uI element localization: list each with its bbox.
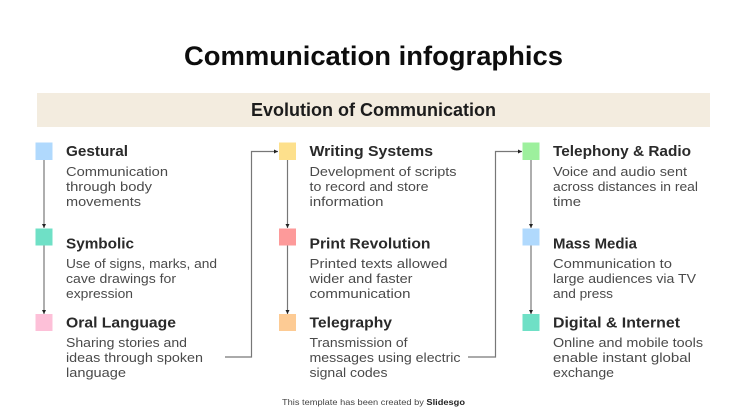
step: gestural: through body xyxy=(66,179,152,194)
step: print revolution: communication xyxy=(310,286,410,301)
arrow: print revolution to telegraphy xyxy=(286,245,288,314)
step: digital and internet xyxy=(522,314,703,380)
step: telephony and radio: across distances in real xyxy=(553,179,698,194)
step: writing systems: information xyxy=(310,194,384,209)
step: telegraphy xyxy=(279,314,461,380)
step: digital and internet: Online and mobile tools xyxy=(553,335,703,350)
step: writing systems: Development of scripts xyxy=(310,164,457,179)
step: mass media: and press xyxy=(553,286,613,301)
step: oral language: Sharing stories and xyxy=(66,335,187,350)
step: gestural: movements xyxy=(66,194,141,209)
step: symbolic: Use of signs, marks, and xyxy=(66,256,217,271)
step: telephony and radio xyxy=(522,142,698,209)
step: digital and internet: enable instant global xyxy=(553,350,691,365)
step: gestural: Gestural xyxy=(66,143,128,160)
title: Communication infographics xyxy=(184,41,563,71)
step: print revolution: Printed texts allowed xyxy=(310,256,448,271)
step: print revolution: wider and faster xyxy=(308,271,413,286)
step: telephony and radio: Telephony & Radio xyxy=(553,143,691,160)
step: writing systems xyxy=(279,142,457,209)
step: telegraphy: messages using electric xyxy=(310,350,461,365)
step: mass media: Mass Media xyxy=(553,236,638,252)
step: oral language xyxy=(36,314,203,380)
arrow: gestural to symbolic xyxy=(43,160,45,228)
arrow: oral language to writing systems xyxy=(225,152,278,357)
step: oral language: language xyxy=(66,365,126,380)
arrow: telephony to mass media xyxy=(530,160,532,228)
step: telephony and radio: time xyxy=(553,194,581,209)
step: print revolution xyxy=(279,228,448,301)
step: symbolic xyxy=(36,228,217,301)
arrow: writing systems to print revolution xyxy=(286,160,288,228)
step: telegraphy: signal codes xyxy=(310,365,388,380)
step: mass media xyxy=(522,228,696,301)
arrow: mass media to digital xyxy=(530,245,532,314)
step: writing systems: Writing Systems xyxy=(310,143,433,160)
step: print revolution: Print Revolution xyxy=(310,236,430,252)
footer credit: This template has been created by Slidesgo xyxy=(282,397,465,407)
step: telegraphy: Transmission of xyxy=(310,335,408,350)
step: symbolic: expression xyxy=(66,286,133,301)
step: oral language: ideas through spoken xyxy=(66,350,203,365)
step: telegraphy: Telegraphy xyxy=(310,314,393,332)
header band: Evolution of Communication xyxy=(251,100,496,120)
step: symbolic: Symbolic xyxy=(66,236,134,252)
step: gestural xyxy=(36,142,168,209)
step: digital and internet: exchange xyxy=(553,365,614,380)
arrow: symbolic to oral language xyxy=(43,245,45,314)
step: telephony and radio: Voice and audio sent xyxy=(553,164,687,179)
step: mass media: Communication to xyxy=(553,256,672,271)
step: oral language: Oral Language xyxy=(66,314,176,332)
step: gestural: Communication xyxy=(66,164,168,179)
step: digital and internet: Digital & Internet xyxy=(553,314,680,332)
step: writing systems: to record and store xyxy=(310,179,428,194)
step: mass media: large audiences via TV xyxy=(553,271,696,286)
step: symbolic: cave drawings for xyxy=(66,271,177,286)
arrow: telegraphy to telephony xyxy=(468,152,522,357)
header band xyxy=(37,93,710,127)
